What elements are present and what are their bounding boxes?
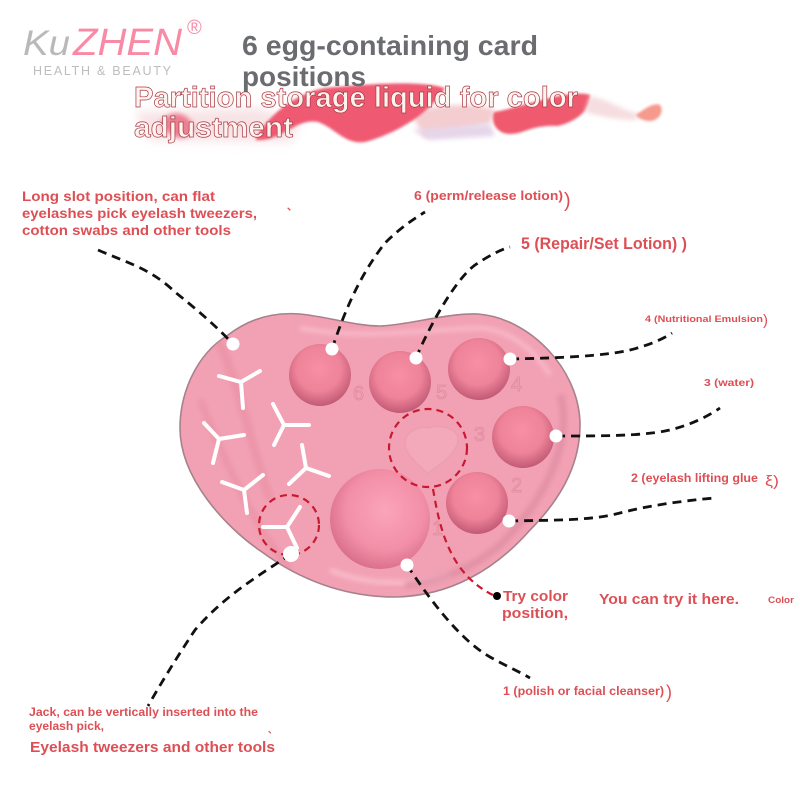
label: long slot: cotton swabs and other tools	[22, 222, 231, 238]
egg wells 1 to 6	[289, 338, 554, 569]
embossed numbers: 3	[474, 424, 485, 446]
label: you can try it here: You can try it here.	[599, 592, 739, 608]
label: 2 eyelash lifting glue: 2 (eyelash lifting glue	[631, 473, 758, 485]
logo: KuZHEN Health & Beauty	[23, 17, 202, 78]
black dashed leader lines	[98, 212, 720, 706]
subtitle: adjustment	[134, 112, 293, 144]
title: 6 egg-containing card	[242, 30, 538, 61]
label: try color position	[502, 588, 568, 622]
label: 4 nutritional emulsion: 4 (Nutritional Emulsion	[645, 314, 763, 325]
embossed numbers: 2	[511, 475, 522, 497]
palette body	[180, 314, 580, 597]
label: long slot: Long slot position, can flat	[22, 188, 215, 204]
label: long slot: eyelashes pick eyelash tweezers,	[22, 205, 257, 221]
label: 6 perm/release lotion: 6 (perm/release lotion)	[414, 189, 563, 203]
leader end dots	[226, 338, 562, 600]
label: 1 polish or facial cleanser: 1 (polish or facial cleanser)	[503, 684, 664, 698]
label: jack: 、	[268, 725, 277, 735]
label: color: Color	[768, 595, 795, 605]
label: jack: Jack, can be vertically inserted into the	[29, 707, 258, 719]
red dashed highlight circles and leader	[259, 409, 495, 596]
logo: KuZHEN Health & Beauty: Ku	[23, 24, 70, 63]
subtitle: Partition storage liquid for color	[134, 82, 578, 114]
label: jack	[29, 707, 277, 756]
label: long slot: 、	[287, 202, 297, 213]
closing bracket 1: )	[666, 682, 672, 702]
title: positions	[242, 61, 366, 92]
label: 5 repair/set lotion: 5 (Repair/Set Lotion) )	[521, 235, 687, 253]
closing bracket 6: )	[564, 190, 571, 212]
closing bracket 2: ξ)	[765, 473, 779, 490]
label: try color position: position,	[502, 605, 568, 622]
jack holders	[204, 371, 329, 548]
embossed numbers: 1	[432, 518, 443, 540]
title	[242, 30, 538, 92]
label: jack: eyelash pick,	[29, 721, 104, 733]
label: 3 water: 3 (water)	[704, 378, 754, 389]
heart try-color well	[405, 426, 458, 473]
embossed numbers: 4	[511, 374, 522, 396]
subtitle	[134, 82, 578, 144]
label: long slot	[22, 188, 297, 238]
logo: KuZHEN Health & Beauty: ®	[187, 17, 202, 39]
paint splash banner	[135, 83, 662, 142]
embossed numbers: 5	[436, 382, 447, 404]
logo: KuZHEN Health & Beauty: HEALTH & BEAUTY	[33, 64, 172, 78]
label: jack: Eyelash tweezers and other tools	[30, 739, 275, 756]
embossed numbers	[353, 374, 522, 540]
logo: KuZHEN Health & Beauty: ZHEN	[72, 22, 183, 64]
embossed numbers: 6	[353, 383, 364, 405]
label: try color position: Try color	[503, 588, 568, 605]
closing bracket 4: )	[763, 312, 768, 329]
